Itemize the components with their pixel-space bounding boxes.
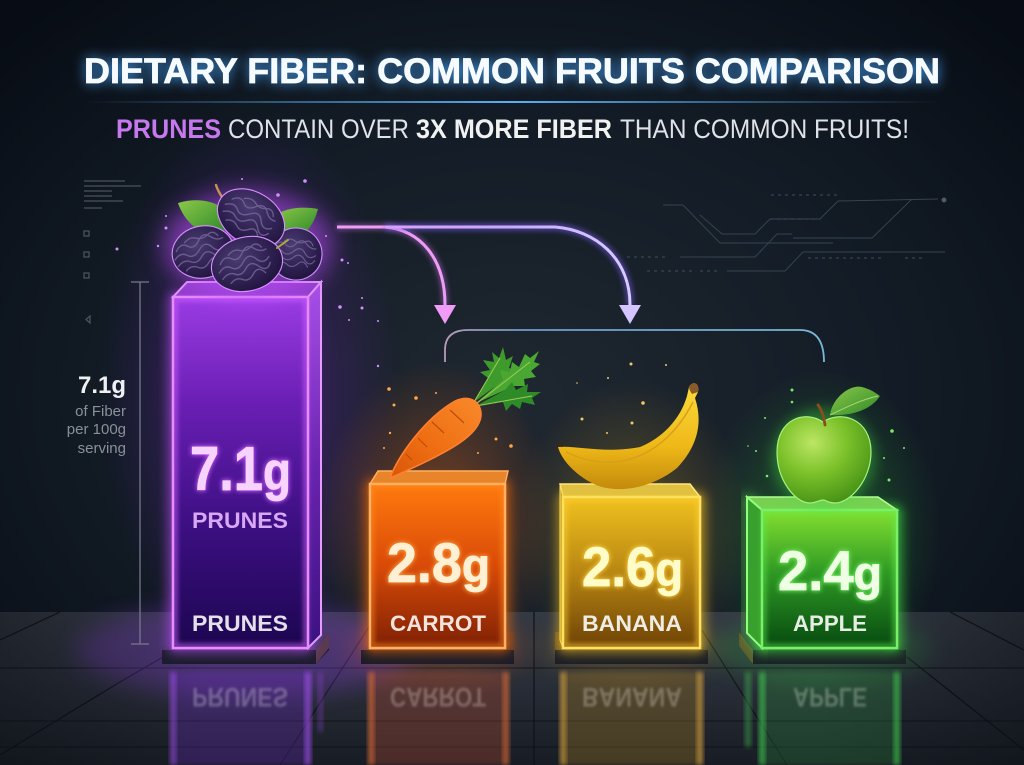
subtitle: CONTAIN OVER [228, 114, 409, 144]
banana base [555, 632, 708, 664]
title divider [84, 101, 940, 103]
reflection: apple [745, 672, 900, 765]
label banana: BANANA [582, 611, 682, 636]
left leaf [178, 200, 224, 234]
side label: 7.1g of fiber per 100g serving: per 100g [67, 421, 126, 438]
value 7.1g: 7.1g [190, 435, 291, 504]
decorative circuit lines right [627, 195, 946, 271]
sparkles: banana [576, 362, 667, 434]
height ruler [131, 282, 149, 644]
reflection: prunes [170, 672, 323, 765]
icon: banana [557, 383, 699, 489]
ambient colour glows [100, 110, 942, 690]
top prune [207, 177, 295, 259]
floor [0, 604, 1024, 765]
reflection: banana [560, 672, 703, 765]
icon: prunes [164, 177, 332, 299]
subtitle [116, 114, 909, 144]
reflection: apple: APPLE [793, 681, 867, 711]
reflection: banana: BANANA [582, 681, 682, 711]
subtitle: 3X MORE FIBER [416, 114, 612, 144]
label carrot: CARROT [390, 611, 487, 636]
side label: 7.1g of fiber per 100g serving: 7.1g [78, 372, 126, 399]
left prune [167, 220, 239, 284]
reflection: carrot: CARROT [390, 681, 486, 711]
sparkles: prunes [116, 178, 379, 367]
prune base [162, 632, 329, 664]
icon: carrot [390, 347, 541, 478]
label apple: APPLE [793, 611, 867, 636]
apple body [777, 417, 871, 503]
value 2.6g: 2.6g [582, 535, 683, 598]
decorative tech lines left [84, 181, 141, 323]
apple base [739, 632, 906, 664]
value 2.4g: 2.4g [778, 539, 882, 602]
icon: apple [772, 387, 880, 508]
carrot bar [361, 471, 514, 664]
sparkles: apple [747, 388, 905, 482]
stem [216, 185, 226, 203]
title: DIETARY FIBER: COMMON FRUITS COMPARISON [84, 52, 940, 91]
apple bar [739, 497, 906, 664]
label prunes upper: PRUNES [192, 508, 288, 533]
right leaf [274, 208, 318, 233]
reflection: prunes: PRUNES [192, 681, 288, 711]
banana bar [555, 484, 708, 664]
carrot base [361, 632, 514, 664]
prune bar [162, 282, 329, 664]
subtitle: THAN COMMON FRUITS! [620, 114, 909, 144]
reflection: carrot [368, 672, 509, 765]
apple stem [818, 405, 825, 425]
value 2.8g: 2.8g [387, 531, 490, 594]
side label: 7.1g of fiber per 100g serving: of Fiber [75, 403, 126, 420]
arrow: prunes to banana [385, 227, 641, 324]
carrot leaves [474, 347, 541, 411]
subtitle: PRUNES [116, 114, 221, 144]
value 2.8g: 2.8g [387, 531, 490, 594]
value 2.4g: 2.4g [778, 539, 882, 602]
sparkles: carrot [383, 387, 513, 454]
arrow: prunes to carrot [337, 227, 456, 324]
title: DIETARY FIBER: COMMON FRUITS COMPARISON [84, 52, 940, 91]
floor reflections [170, 672, 900, 765]
side label: 7.1g of fiber per 100g serving [67, 372, 126, 457]
value 2.6g: 2.6g [582, 535, 683, 598]
bracket over common fruits [445, 330, 824, 362]
label prunes lower: PRUNES [192, 611, 288, 636]
right prune [266, 224, 326, 284]
value 7.1g: 7.1g [190, 435, 291, 504]
side label: 7.1g of fiber per 100g serving: serving [78, 440, 126, 457]
front prune [206, 229, 288, 299]
apple leaf [830, 387, 880, 415]
